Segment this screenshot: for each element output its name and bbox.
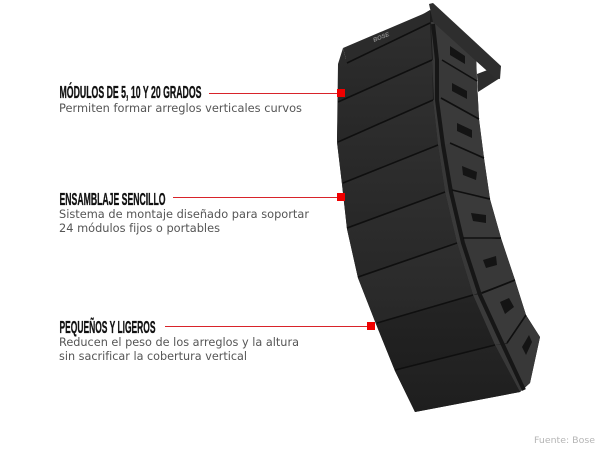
callout: ensamblaje — [59, 189, 345, 235]
callout: ensamblaje: ENSAMBLAJE SENCILLO — [60, 189, 166, 209]
brand label: BOSE — [373, 32, 391, 44]
callout: módulos — [59, 81, 345, 115]
description: Sistema de montaje diseñado para soportar — [59, 207, 309, 221]
leader line — [209, 92, 338, 94]
callout: pequeños: sin sacrificar la cobertura vertical — [59, 349, 247, 363]
rear rigging bracket — [477, 66, 500, 92]
front faces of the cabinets — [337, 11, 520, 412]
callout: pequeños — [59, 316, 375, 363]
callout: módulos: MÓDULOS DE 5, 10 Y 20 GRADOS — [60, 81, 202, 102]
description: Reducen el peso de los arreglos y la altura — [59, 335, 299, 349]
top rigging rail — [429, 3, 501, 79]
side faces of the cabinets — [431, 22, 540, 392]
marker — [337, 89, 345, 97]
speaker line array — [337, 3, 540, 412]
cabinet seams — [338, 23, 526, 390]
leader line — [173, 196, 338, 198]
cabinet backing silhouette — [337, 10, 540, 412]
side handle cutouts — [450, 46, 532, 355]
leader line — [165, 326, 368, 328]
callout: ensamblaje: 24 módulos fijos o portables — [59, 221, 220, 235]
marker — [337, 193, 345, 201]
callout: pequeños: PEQUEÑOS Y LIGEROS — [60, 316, 156, 337]
description: Permiten formar arreglos verticales curvos — [59, 101, 302, 115]
marker — [367, 322, 375, 330]
source credit: Fuente: Bose — [534, 436, 595, 446]
